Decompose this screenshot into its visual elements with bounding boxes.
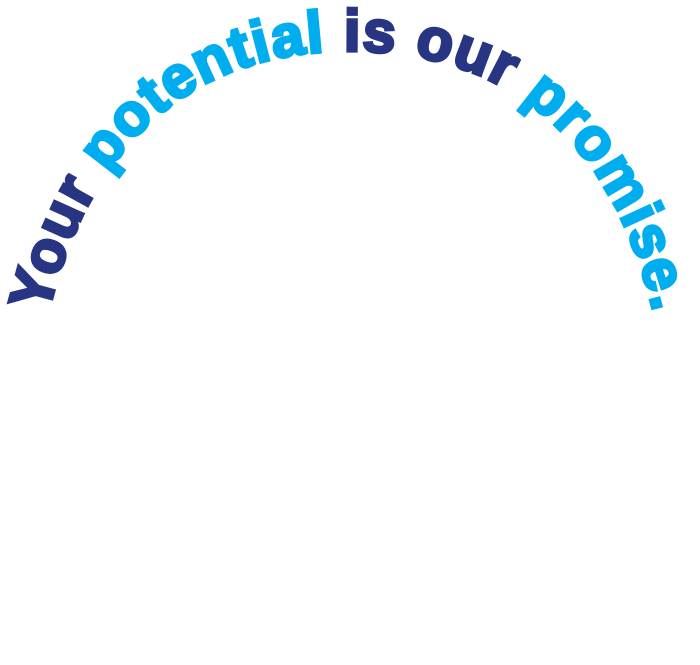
title: curved slogan: Your potential is our promise. — [6, 6, 678, 310]
